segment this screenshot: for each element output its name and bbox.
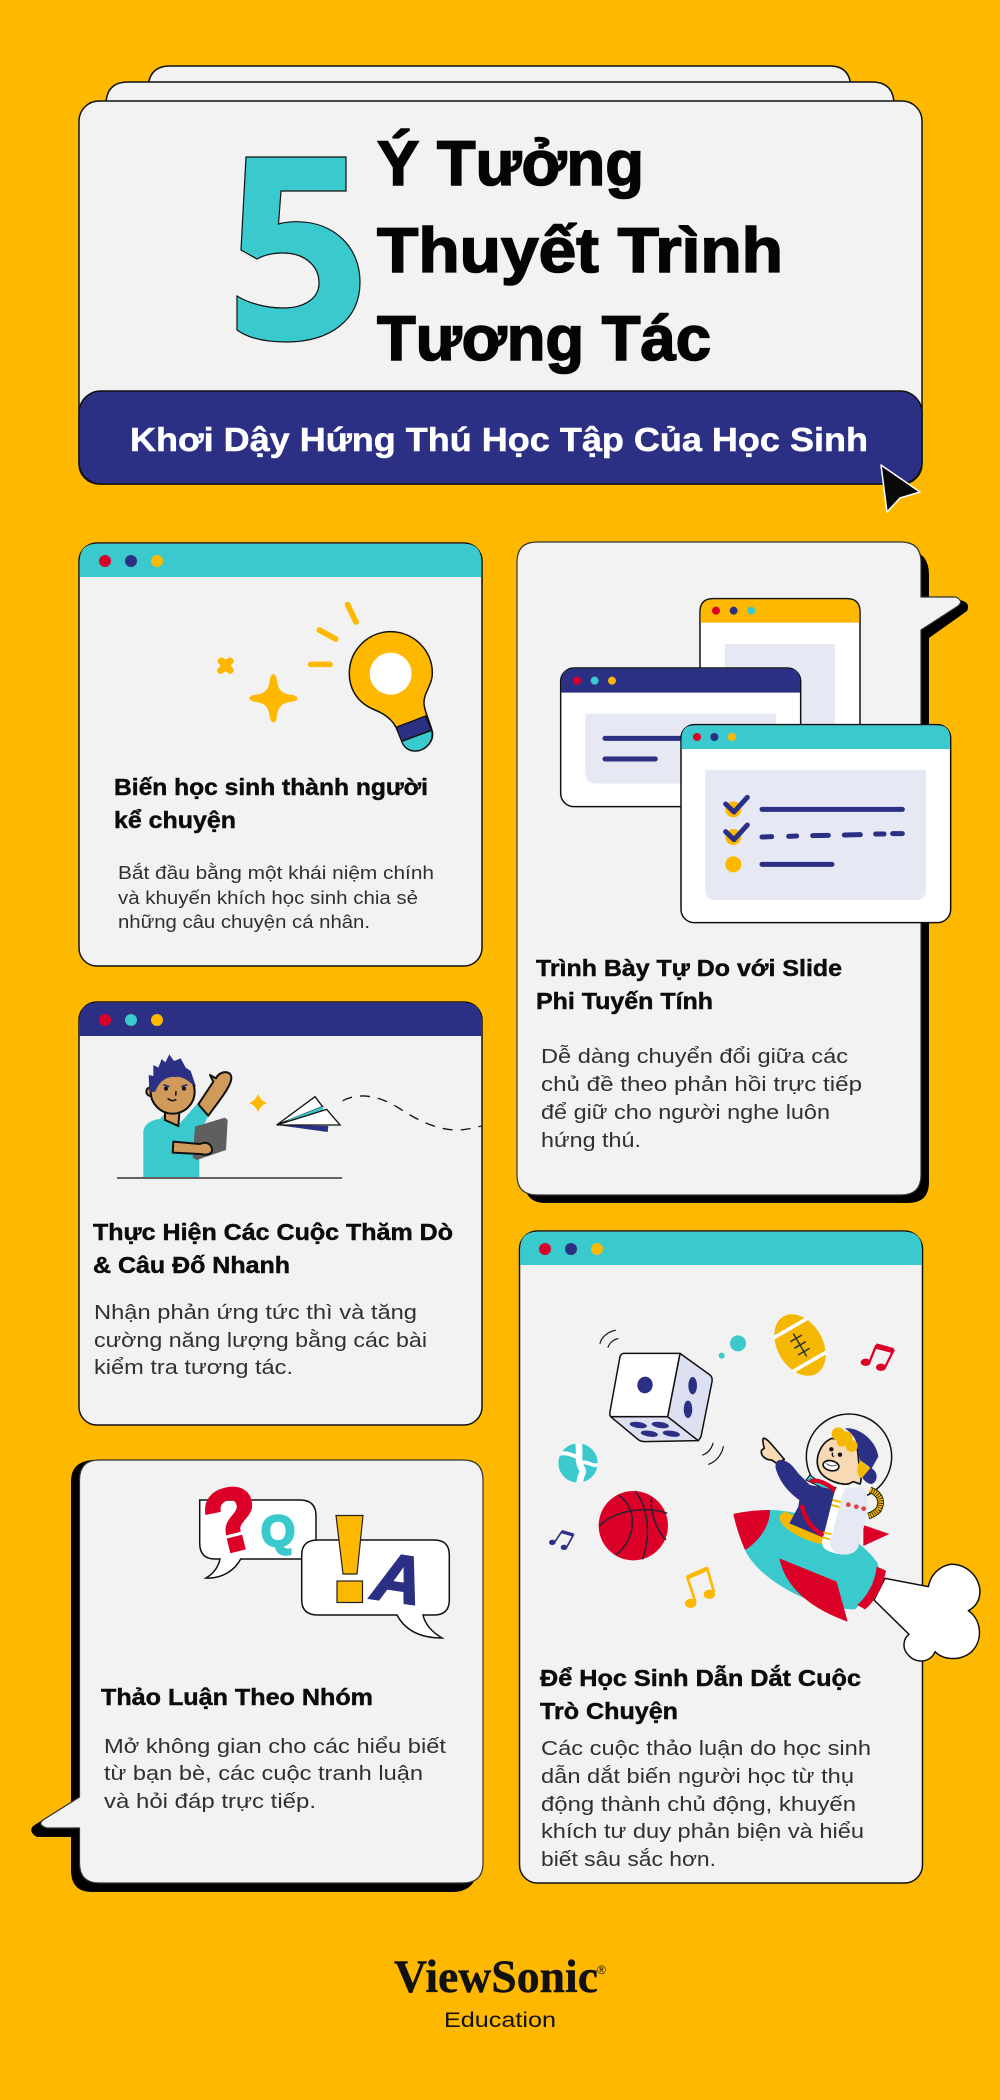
icon: exhaust cloud	[874, 1564, 980, 1661]
logo: ViewSonic Education: ®	[597, 1963, 606, 1977]
body text: Các cuộc thảo luận do học sinh	[541, 1737, 871, 1760]
card body	[79, 1002, 482, 1425]
body text: Dễ dàng chuyển đổi giữa các	[541, 1045, 848, 1068]
window: yellow	[700, 599, 860, 737]
body text: những câu chuyện cá nhân.	[118, 911, 370, 932]
body text: Bắt đầu bằng một khái niệm chính	[118, 862, 434, 883]
window bar	[520, 1232, 922, 1265]
big number 5	[237, 157, 360, 342]
body text	[541, 1045, 862, 1152]
heading	[114, 774, 428, 833]
body text	[94, 1301, 427, 1379]
body text: chủ đề theo phản hồi trực tiếp	[541, 1073, 862, 1096]
speech bubble card	[41, 1460, 483, 1883]
icon: red music note	[861, 1346, 893, 1371]
logo: ViewSonic Education	[394, 1951, 606, 2032]
logo: ViewSonic Education: ViewSonic	[394, 1951, 598, 2003]
icon: cursor	[881, 465, 920, 512]
body text: Nhận phản ứng tức thì và tăng	[94, 1301, 417, 1324]
title: Thuyết Trình	[377, 216, 783, 286]
illustration: overlapping slide windows	[561, 599, 951, 923]
heading: Biến học sinh thành người	[114, 774, 428, 800]
heading: Trình Bày Tự Do với Slide	[536, 955, 842, 981]
logo: ViewSonic Education: Education	[444, 2009, 556, 2032]
icon: paper plane with dashed trail	[249, 1094, 482, 1132]
illustration: student with tablet	[143, 1054, 231, 1177]
window: teal checklist	[681, 725, 951, 923]
body text: Mở không gian cho các hiểu biết	[104, 1735, 446, 1758]
illustration: dice, balls, notes and rocket	[549, 1305, 980, 1661]
body text: cường năng lượng bằng các bài	[94, 1329, 427, 1352]
body text: để giữ cho người nghe luôn	[541, 1101, 830, 1124]
body text	[541, 1737, 871, 1871]
body text: và hỏi đáp trực tiếp.	[104, 1790, 316, 1813]
body text: biết sâu sắc hơn.	[541, 1848, 716, 1871]
body text: động thành chủ động, khuyến	[541, 1793, 856, 1816]
icon: question and answer bubbles: ?	[194, 1465, 270, 1574]
body text: kiểm tra tương tác.	[94, 1356, 293, 1379]
body text: khích tư duy phản biện và hiểu	[541, 1820, 864, 1843]
icon: basketball	[599, 1491, 668, 1560]
icon: globe	[558, 1443, 599, 1485]
speech bubble shadow	[525, 550, 968, 1203]
icon: navy music note	[549, 1532, 573, 1550]
body text	[104, 1735, 446, 1813]
panel: student-led conversation	[520, 1231, 980, 1883]
back tab middle	[106, 82, 894, 130]
floor line	[117, 1177, 342, 1179]
body text: dẫn dắt biến người học từ thụ	[541, 1765, 854, 1788]
panel: non-linear slides	[517, 542, 968, 1203]
card body	[79, 543, 482, 966]
heading: Để Học Sinh Dẫn Dắt Cuộc	[540, 1664, 861, 1691]
body text: từ bạn bè, các cuộc tranh luận	[104, 1762, 423, 1785]
heading: Phi Tuyến Tính	[536, 988, 713, 1014]
body text: và khuyến khích học sinh chia sẻ	[118, 887, 418, 908]
panel: polls and quizzes	[79, 1002, 482, 1425]
card body	[520, 1231, 922, 1883]
heading: Thảo Luận Theo Nhóm	[101, 1684, 373, 1710]
heading: Trò Chuyện	[540, 1698, 678, 1724]
heading	[536, 955, 842, 1014]
icon: dice	[600, 1330, 723, 1464]
window bar	[80, 1003, 481, 1036]
heading: & Câu Đố Nhanh	[93, 1252, 290, 1278]
header panel	[79, 66, 922, 512]
title	[377, 129, 783, 374]
title: Ý Tưởng	[377, 129, 644, 199]
panel: group discussion	[31, 1460, 483, 1892]
icon: question and answer bubbles: Q	[261, 1507, 295, 1556]
illustration: astronaut	[761, 1414, 892, 1554]
icon: football	[764, 1305, 836, 1385]
icon: question and answer bubbles	[194, 1465, 449, 1638]
heading	[93, 1219, 453, 1278]
heading: kể chuyện	[114, 807, 236, 833]
body text	[118, 862, 434, 932]
icon: rocket	[733, 1510, 889, 1622]
subtitle banner: Khơi Dậy Hứng Thú Học Tập Của Học Sinh	[130, 421, 868, 458]
window: navy	[561, 668, 801, 807]
body text: hứng thú.	[541, 1129, 641, 1152]
icon: teal dots	[719, 1335, 746, 1359]
heading: Thực Hiện Các Cuộc Thăm Dò	[93, 1219, 453, 1245]
subtitle banner	[79, 391, 922, 484]
panel: storytellers	[79, 543, 482, 966]
speech bubble card	[517, 542, 961, 1195]
back tab rear	[148, 66, 851, 120]
speech bubble shadow	[31, 1460, 477, 1892]
title: Tương Tác	[377, 304, 711, 374]
header card	[79, 101, 922, 484]
window bar	[80, 544, 481, 577]
icon: light bulb with sparkles	[217, 605, 433, 751]
heading	[540, 1664, 861, 1724]
icon: question and answer bubbles: A	[366, 1538, 427, 1620]
icon: yellow music note	[685, 1569, 715, 1608]
